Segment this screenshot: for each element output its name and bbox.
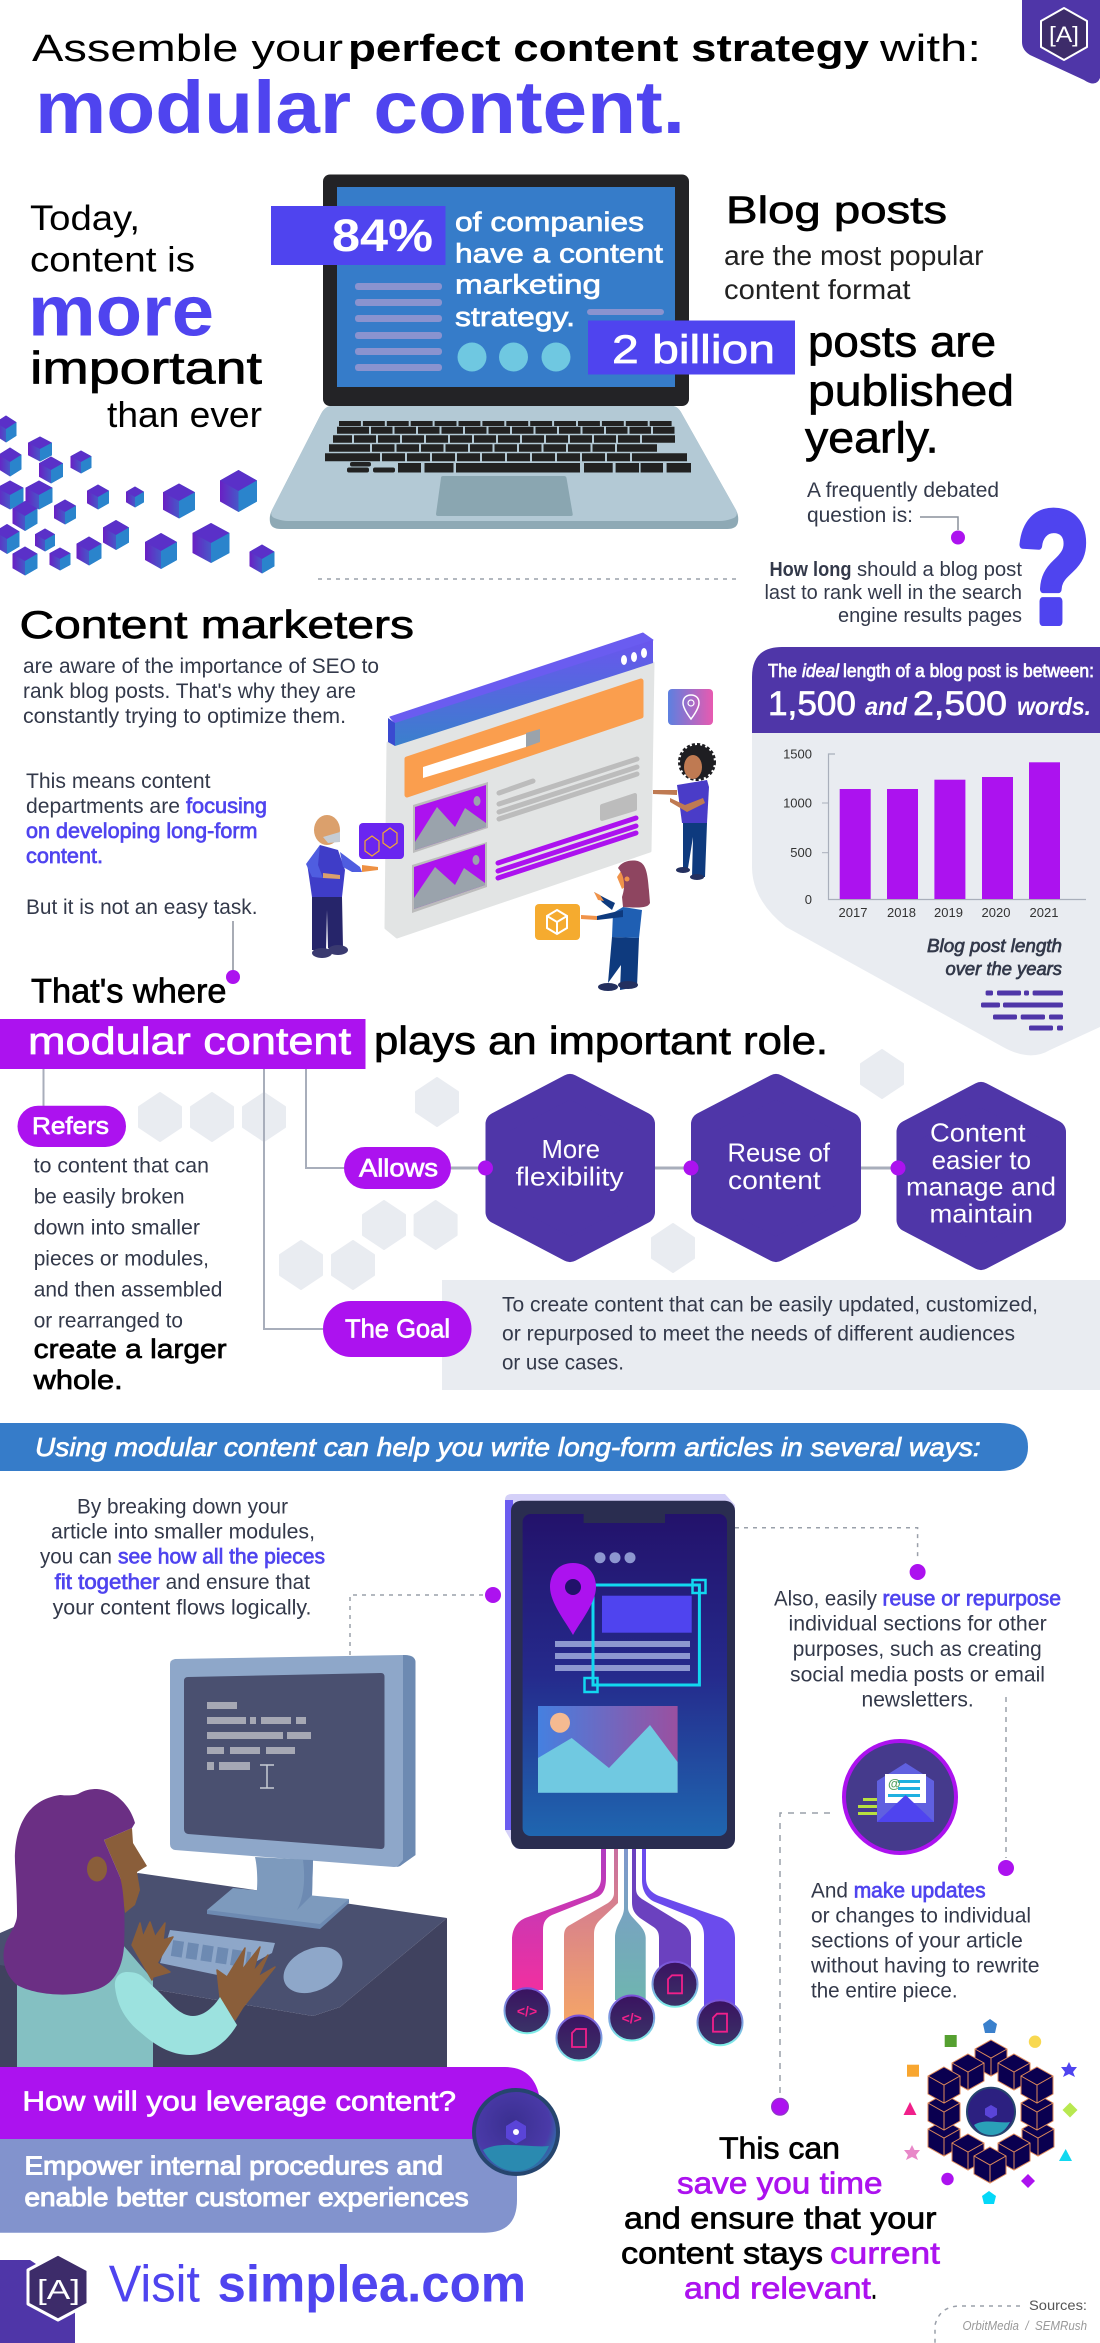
text: blog posts: published: [808, 366, 1014, 416]
text: refers definition: create a larger: [34, 1334, 227, 1364]
hexagon: more flexibility: More: [542, 1134, 600, 1164]
connector dot: [485, 1587, 501, 1603]
heading: modular content plays an important role: modular content: [28, 1021, 352, 1063]
text: debated question: engine results pages: [838, 604, 1022, 627]
hexagon: reuse of content: Reuse of: [728, 1138, 831, 1168]
hexagon: easier to manage: manage and: [906, 1172, 1056, 1202]
panel: how will you leverage content: [0, 2067, 558, 2233]
text: blog posts: yearly.: [805, 414, 938, 462]
text: make updates: or changes to individual: [811, 1905, 1031, 1928]
logo badge: top right: [A]: [1049, 22, 1079, 47]
node: document: [698, 2000, 742, 2045]
person: man with beard: [306, 815, 378, 958]
node: code: </>: [622, 2010, 642, 2026]
footer: visit simplea.com: simplea.com: [218, 2256, 526, 2314]
panel: the goal: or use cases.: [502, 1351, 624, 1374]
text: sources: [935, 2297, 1087, 2343]
icon: document lines: [981, 990, 1063, 1030]
text: this can save you time: [621, 2130, 940, 2305]
text: blog posts: posts are: [808, 318, 996, 366]
text: breaking down article: your content flows logically.: [53, 1596, 311, 1619]
text: this can save you time: and ensure that your: [624, 2200, 936, 2235]
text: reuse or repurpose: reuse or repurpose: [882, 1588, 1061, 1611]
text: reuse or repurpose: [774, 1588, 1061, 1712]
stat: 84 percent: 84%: [332, 210, 433, 261]
text: blog posts: Blog posts: [726, 190, 947, 232]
footer: visit simplea.com: [A]: [37, 2274, 80, 2305]
text: refers definition: pieces or modules,: [34, 1248, 209, 1271]
illustration: laptop: [270, 174, 738, 529]
connector dot: [772, 2098, 788, 2115]
text: reuse or repurpose: purposes, such as creating: [793, 1638, 1042, 1661]
text: this can save you time: current: [830, 2235, 940, 2270]
hexagon: more flexibility: [498, 1086, 643, 1250]
bar chart: blog post length by year: 1000: [783, 796, 812, 810]
text: make updates: sections of your article: [811, 1930, 1023, 1953]
text: this can save you time: content stays: [621, 2235, 823, 2270]
text: make updates: And: [811, 1880, 848, 1903]
pill: allows: Allows: [359, 1155, 438, 1183]
bar chart: blog post length by year: [783, 746, 1086, 920]
text: debated question: should a blog post: [857, 558, 1022, 581]
heading: ideal length: The: [768, 661, 797, 681]
text: blog posts: content format: [724, 274, 911, 305]
text: make updates: make updates: [854, 1880, 986, 1903]
text: this can save you time: and relevant: [684, 2270, 871, 2305]
illustration: module ring with shapes: [904, 2019, 1078, 2204]
title: with:: [879, 28, 981, 70]
text: sources: OrbitMedia / SEMRush: [962, 2318, 1087, 2333]
text: make updates: [810, 1880, 1040, 2003]
pill: allows: [344, 1147, 451, 1189]
node: code: </>: [517, 2003, 537, 2019]
panel: how will you leverage content: enable better customer experiences: [24, 2182, 469, 2212]
hexagon: reuse of content: content: [728, 1165, 822, 1195]
pill: refers: [18, 1106, 126, 1147]
bar chart: blog post length by year: 2018: [887, 905, 916, 920]
stat: 2 billion: 2 billion: [612, 328, 775, 372]
icon: email circle: [844, 1741, 956, 1853]
text: debated question: A frequently debated: [807, 478, 999, 502]
text: today content is more important: than ever: [107, 394, 262, 435]
panel: the goal: The Goal: [345, 1314, 450, 1344]
text: reuse or repurpose: newsletters.: [862, 1689, 974, 1712]
heading: ideal length: and: [865, 693, 908, 721]
text: refers definition: to content that can: [34, 1155, 209, 1178]
icon: location tile: [668, 689, 713, 725]
text: this can save you time: This can: [719, 2130, 840, 2165]
illustration: person at desktop computer: [0, 1655, 447, 2067]
text: today content is more important: [28, 199, 263, 435]
text: content marketers: are aware of the importance of SEO to: [23, 654, 379, 678]
icon: badge circle: [474, 2090, 558, 2174]
icon: orange cube tile: [535, 904, 580, 940]
bar chart: blog post length by year: 500: [790, 845, 812, 860]
hexagon: easier to manage: [906, 1094, 1056, 1258]
stat: 84 percent: [271, 206, 664, 332]
chart caption: over the years: [946, 958, 1062, 979]
pill: refers: Refers: [32, 1113, 109, 1140]
text: breaking down article: you can: [40, 1545, 112, 1568]
person: woman with long hair: [581, 860, 650, 991]
text: this can save you time: save you time: [677, 2165, 882, 2200]
icon: email circle: @: [888, 1776, 901, 1791]
banner: several ways: [0, 1423, 1028, 1471]
connector dot: [226, 970, 240, 984]
chart caption: [927, 935, 1062, 979]
text: reuse or repurpose: individual sections for other: [788, 1613, 1047, 1636]
connector dots: [478, 1160, 906, 1176]
panel: ideal length chart: [752, 647, 1100, 1055]
text: today content is more important: content is: [30, 240, 195, 280]
bar chart: blog post length by year: 2019: [934, 905, 963, 920]
hexagon: reuse of content: [703, 1086, 849, 1250]
node: code: [609, 1996, 654, 2040]
text: today content is more important: important: [30, 342, 263, 394]
icon: purple cube tile: [359, 823, 404, 859]
text: refers definition: be easily broken: [34, 1186, 185, 1208]
text: content marketers: [20, 604, 414, 919]
person: woman with curly hair: [653, 745, 714, 880]
heading: modular content plays an important role: plays an important role.: [374, 1020, 828, 1063]
hexagon: more flexibility: flexibility: [516, 1162, 624, 1192]
heading: modular content plays an important role: That's where: [31, 972, 226, 1010]
text: breaking down article: article into smaller modules,: [51, 1520, 315, 1543]
text: today content is more important: more: [28, 272, 214, 352]
text: content marketers: content.: [26, 844, 103, 868]
heading: ideal length: ideal: [802, 661, 840, 681]
logo badge: top right: [1022, 0, 1100, 84]
heading: ideal length: words.: [1017, 693, 1091, 721]
text: reuse or repurpose: social media posts or email: [790, 1664, 1045, 1687]
text: this can save you time: .: [871, 2270, 877, 2305]
title: Assemble your: [32, 28, 343, 70]
heading: ideal length: length of a blog post is between:: [843, 661, 1094, 681]
bar chart: blog post length by year: 2020: [982, 905, 1010, 920]
bar chart: blog post length by year: 2017: [839, 905, 867, 920]
hexagon cube cluster: [0, 416, 274, 576]
text: breaking down article: and ensure that: [166, 1571, 310, 1594]
title: [32, 28, 981, 149]
text: refers definition: [33, 1155, 227, 1395]
node: document: [556, 2016, 602, 2060]
text: breaking down article: By breaking down your: [77, 1495, 288, 1518]
node: code: [504, 1988, 550, 2033]
panel: the goal: To create content that can be easily updated, customized,: [502, 1294, 1038, 1317]
text: make updates: the entire piece.: [811, 1980, 958, 2003]
panel: the goal: or repurposed to meet the needs of different audiences: [502, 1323, 1015, 1346]
stat: 84 percent: strategy.: [455, 302, 575, 332]
text: debated question: How long: [770, 558, 852, 581]
text: blog posts: [724, 190, 1014, 462]
text: content marketers: But it is not an easy task.: [26, 895, 258, 919]
text: content marketers: departments are: [26, 794, 180, 818]
hexagon: easier to manage: maintain: [930, 1199, 1033, 1229]
text: refers definition: and then assembled: [34, 1279, 222, 1302]
node: document: [652, 1962, 698, 2007]
text: blog posts: are the most popular: [724, 240, 984, 271]
text: content marketers: Content marketers: [20, 604, 414, 647]
text: content marketers: rank blog posts. That's why they are: [23, 679, 356, 703]
illustration: browser window with people: [306, 633, 714, 991]
text: content marketers: on developing long-form: [26, 819, 258, 843]
hexagon: easier to manage: easier to: [932, 1145, 1031, 1175]
heading: ideal length: 2,500: [913, 685, 1007, 723]
text: refers definition: whole.: [33, 1365, 123, 1395]
heading: modular content plays an important role: [0, 972, 828, 1069]
stat: 84 percent: marketing: [455, 270, 601, 300]
bar chart: blog post length by year: 2021: [1030, 905, 1058, 920]
monitor: [170, 1655, 416, 1929]
text: breaking down article: see how all the pieces: [118, 1545, 325, 1568]
text: sources: Sources:: [1029, 2297, 1087, 2313]
hexagon: easier to manage: Content: [930, 1118, 1026, 1148]
chart caption: Blog post length: [927, 935, 1062, 956]
text: debated question: [764, 478, 1022, 627]
text: debated question: question is:: [807, 503, 913, 527]
text: refers definition: down into smaller: [34, 1217, 200, 1240]
panel: how will you leverage content: How will you leverage content?: [22, 2086, 456, 2117]
text: content marketers: This means content: [26, 769, 211, 793]
panel: the goal: [323, 1280, 1100, 1390]
bar chart: blog post length by year: 1500: [783, 746, 812, 762]
text: breaking down article: fit together: [55, 1571, 160, 1594]
heading: ideal length: [768, 661, 1094, 723]
panel: how will you leverage content: Empower internal procedures and: [24, 2150, 443, 2180]
connector dot: [998, 1860, 1014, 1876]
text: content marketers: constantly trying to optimize them.: [23, 704, 346, 728]
text: today content is more important: Today,: [30, 199, 140, 238]
footer: visit simplea.com: Visit: [109, 2256, 201, 2314]
text: reuse or repurpose: Also, easily: [774, 1588, 877, 1611]
bar chart: blog post length by year: 0: [805, 892, 812, 907]
illustration: smartphone: [505, 1494, 735, 1849]
illustration: phone ribbons with nodes: [504, 1849, 742, 2060]
stat: 84 percent: have a content: [455, 238, 664, 268]
text: content marketers: focusing: [186, 794, 267, 818]
heading: ideal length: 1,500: [768, 685, 856, 723]
connector dot: [910, 1564, 926, 1580]
text: debated question: last to rank well in the search: [764, 581, 1022, 604]
footer: visit simplea.com: [0, 2254, 526, 2343]
stat: 84 percent: of companies: [455, 207, 644, 237]
title: modular content.: [35, 66, 685, 149]
text: breaking down article: [40, 1495, 325, 1619]
banner: several ways: Using modular content can help you write long-form articles in several ways:: [35, 1432, 981, 1462]
text: refers definition: or rearranged to: [34, 1310, 183, 1333]
stat: 2 billion: [588, 320, 795, 374]
title: perfect content strategy: [348, 28, 869, 70]
text: make updates: without having to rewrite: [810, 1955, 1040, 1978]
